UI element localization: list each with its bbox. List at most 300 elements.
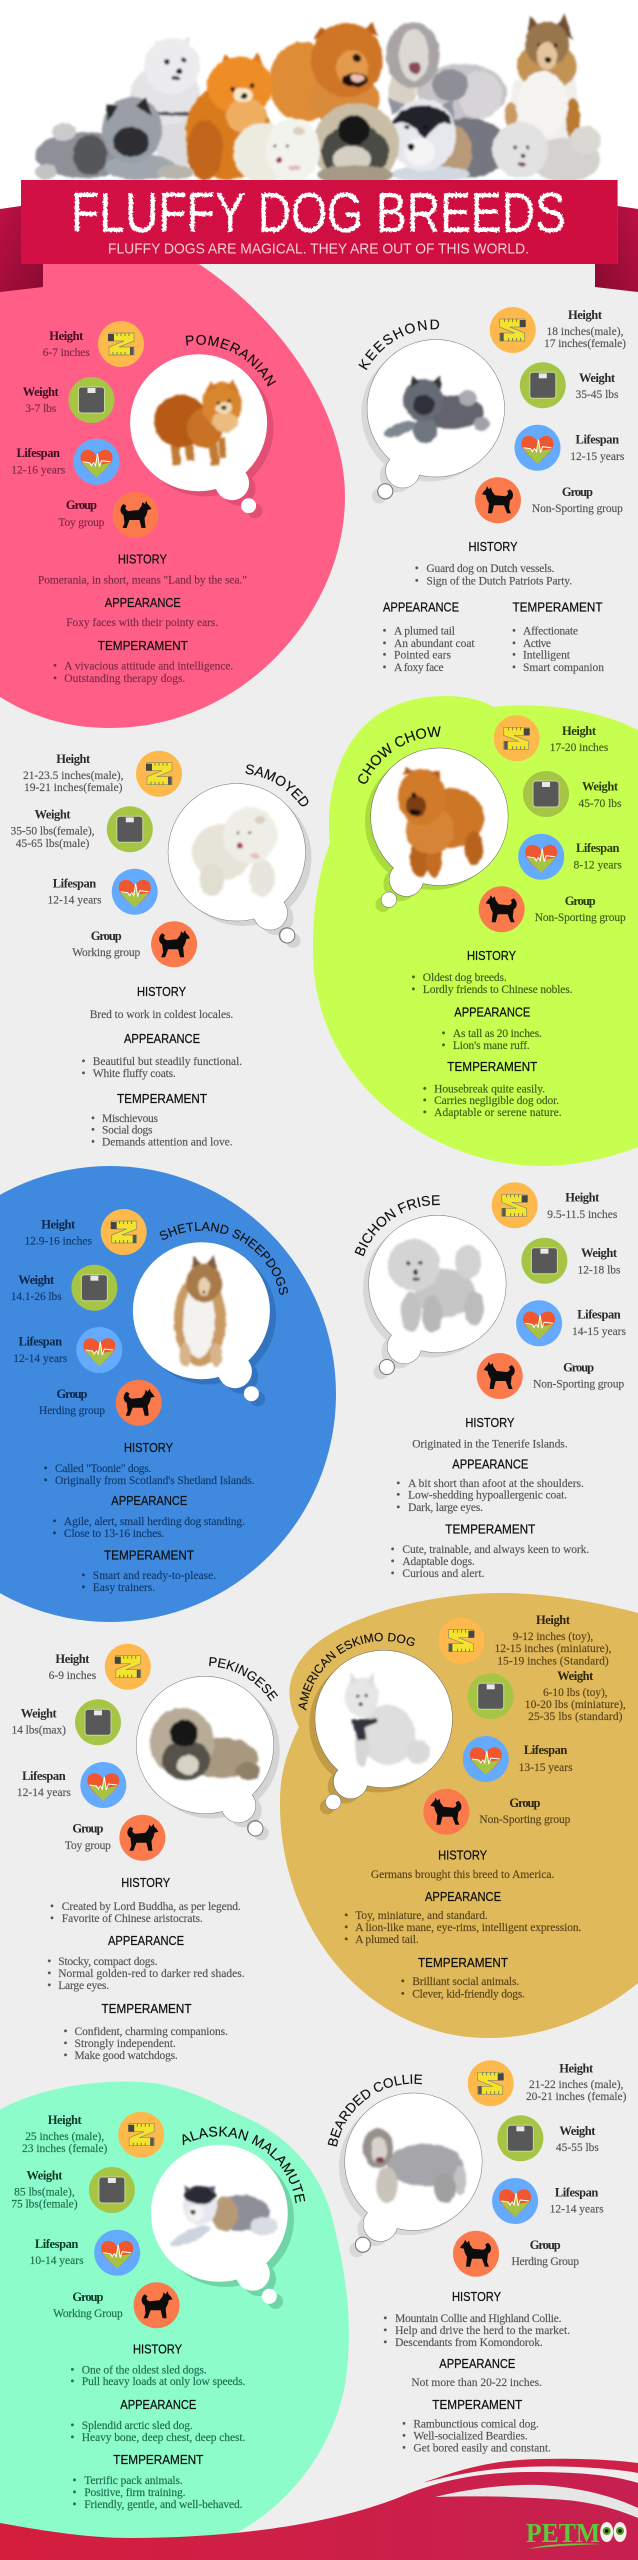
text: temperament: Cute, trainable, and always keen to work. bbox=[402, 1544, 589, 1556]
stat: weight bbox=[11, 1699, 121, 1745]
text: temperament: • bbox=[91, 1124, 95, 1136]
text: temperament: • bbox=[423, 1107, 427, 1119]
text: temperament: • bbox=[64, 2026, 68, 2038]
text: appearance: Heavy bone, deep chest, deep chest. bbox=[82, 2432, 246, 2444]
text: temperament: • bbox=[402, 2430, 406, 2442]
text: temperament: TEMPERAMENT bbox=[418, 1955, 508, 1970]
text: temperament: • bbox=[512, 650, 516, 662]
stat: height: Height bbox=[565, 1190, 600, 1204]
text: history: Help and drive the herd to the market. bbox=[395, 2325, 570, 2337]
stat: weight: 85 lbs(male), bbox=[14, 2186, 75, 2198]
speech bubble bbox=[151, 2145, 294, 2309]
text: appearance: APPEARANCE bbox=[454, 1004, 531, 1020]
text: history: • bbox=[383, 2337, 387, 2349]
text: history bbox=[90, 984, 233, 1021]
stat: height bbox=[24, 1209, 147, 1255]
text: temperament: Confident, charming companions. bbox=[74, 2026, 228, 2038]
text: appearance: • bbox=[47, 1980, 51, 1992]
stat: lifespan: 8-12 years bbox=[574, 860, 622, 872]
text: appearance: • bbox=[382, 638, 387, 650]
stat: group: Group bbox=[66, 498, 97, 512]
text: temperament: Brilliant social animals. bbox=[412, 1976, 519, 1988]
panel: Keeshond bbox=[358, 307, 626, 674]
stat: lifespan: 12-14 years bbox=[17, 1787, 71, 1799]
stat: height bbox=[22, 2112, 164, 2158]
stat: group: Group bbox=[562, 485, 593, 499]
stat: group: Working group bbox=[72, 947, 140, 959]
stat: lifespan bbox=[516, 1300, 627, 1346]
stat: height bbox=[494, 715, 609, 761]
stat: lifespan bbox=[30, 2230, 140, 2276]
text: temperament: • bbox=[53, 673, 57, 685]
stat: lifespan bbox=[492, 2178, 604, 2224]
stat: lifespan: 10-14 years bbox=[30, 2255, 84, 2267]
stat: lifespan bbox=[13, 1327, 122, 1373]
text: history: HISTORY bbox=[137, 984, 186, 999]
stat: weight bbox=[11, 1265, 117, 1311]
text: temperament: TEMPERAMENT bbox=[113, 2452, 203, 2467]
breed name: POMERANIAN bbox=[186, 334, 276, 386]
breed name: AMERICAN ESKIMO DOG bbox=[298, 1632, 415, 1710]
text: temperament: Adaptable or serene nature. bbox=[434, 1107, 562, 1119]
text: appearance: • bbox=[47, 1968, 51, 1980]
stat: group: Group bbox=[530, 2238, 561, 2252]
dog: collie bbox=[505, 14, 580, 143]
stat: lifespan: Lifespan bbox=[53, 876, 96, 890]
text: appearance bbox=[66, 595, 218, 629]
stat: group bbox=[65, 1815, 165, 1861]
stat: height bbox=[492, 1182, 618, 1228]
stat: group: Herding Group bbox=[511, 2256, 579, 2268]
dog photo: American Eskimo Dog bbox=[345, 1672, 430, 1767]
text: appearance: • bbox=[52, 1516, 57, 1528]
text: appearance: • bbox=[52, 1528, 57, 1540]
text: appearance: White fluffy coats. bbox=[93, 1068, 176, 1080]
dog: chow chow bbox=[269, 22, 383, 126]
stat: height bbox=[43, 321, 144, 367]
stat: height bbox=[468, 2060, 627, 2106]
stat: height: 21-22 inches (male), bbox=[529, 2079, 624, 2091]
stat: lifespan: Lifespan bbox=[576, 432, 619, 446]
stat: group bbox=[477, 1353, 624, 1399]
stat: lifespan: 13-15 years bbox=[519, 1762, 573, 1774]
stat: lifespan bbox=[518, 834, 622, 880]
text: temperament: • bbox=[81, 1570, 85, 1582]
text: history: Called "Toonie" dogs. bbox=[55, 1463, 152, 1475]
stat: group: Group bbox=[563, 1360, 594, 1374]
stat: lifespan: Lifespan bbox=[16, 446, 60, 460]
stat: height: 12.9-16 inches bbox=[24, 1236, 92, 1248]
text: appearance: • bbox=[47, 1956, 51, 1968]
stat: height: 23 inches (female) bbox=[22, 2143, 108, 2155]
text: temperament bbox=[64, 2001, 228, 2062]
text: appearance: An abundant coat bbox=[394, 638, 475, 650]
text: appearance: • bbox=[396, 1502, 400, 1514]
stat: lifespan: 12-15 years bbox=[570, 451, 625, 463]
text: history: • bbox=[70, 2376, 74, 2388]
panel: Pomeranian bbox=[0, 264, 345, 728]
text: appearance: • bbox=[442, 1028, 446, 1040]
text: history: Germans brought this breed to America. bbox=[371, 1869, 554, 1881]
stat: height: 6-7 inches bbox=[43, 347, 90, 359]
text: history: Guard dog on Dutch vessels. bbox=[426, 563, 555, 575]
speech bubble bbox=[339, 2093, 482, 2257]
text: appearance: • bbox=[442, 1040, 446, 1052]
stat: height bbox=[23, 751, 182, 797]
text: history: Sign of the Dutch Patriots Party. bbox=[426, 576, 572, 588]
speech bubble bbox=[130, 354, 274, 518]
text: appearance bbox=[411, 2356, 542, 2389]
text: history: • bbox=[383, 2313, 387, 2325]
text: temperament: • bbox=[391, 1568, 395, 1580]
text: temperament: Positive, firm training. bbox=[84, 2487, 186, 2499]
text: appearance: • bbox=[396, 1478, 400, 1490]
stat: lifespan: Lifespan bbox=[22, 1769, 66, 1783]
dog: samoyed bbox=[233, 118, 320, 183]
text: history bbox=[70, 2342, 246, 2388]
text: history: Originally from Scotland's Shetland Islands. bbox=[55, 1475, 255, 1487]
text: temperament: Terrific pack animals. bbox=[84, 2475, 183, 2487]
ribbon: left tail bbox=[0, 206, 43, 292]
stat: weight bbox=[523, 771, 622, 817]
stat: weight: 12-18 lbs bbox=[578, 1264, 621, 1276]
breed name: CHOW CHOW bbox=[358, 726, 441, 784]
dog photo: Pomeranian bbox=[154, 380, 242, 465]
text: temperament bbox=[423, 1059, 562, 1119]
stat: height: 17 inches(female) bbox=[544, 338, 626, 350]
text: temperament: • bbox=[423, 1084, 427, 1096]
text: history: Pull heavy loads at only low speeds. bbox=[82, 2376, 246, 2388]
text: history: HISTORY bbox=[465, 1415, 515, 1430]
stat: height: 6-9 inches bbox=[49, 1670, 97, 1682]
stat: group: Group bbox=[565, 894, 596, 908]
stat: group: Non-Sporting group bbox=[535, 912, 626, 924]
subtitle: FLUFFY DOGS ARE MAGICAL. THEY ARE OUT OF THIS WORLD. bbox=[108, 240, 529, 258]
dog photo: Pekingese bbox=[150, 1708, 260, 1780]
text: appearance: • bbox=[70, 2420, 74, 2432]
dog photo: Shetland Sheepdog bbox=[174, 1255, 226, 1367]
stat: height: Height bbox=[562, 724, 597, 738]
header dogs group photo bbox=[35, 14, 601, 187]
stat: lifespan bbox=[17, 1762, 126, 1808]
text: history: HISTORY bbox=[121, 1875, 170, 1890]
stat: weight: Weight bbox=[23, 385, 60, 399]
stat: height: 25 inches (male), bbox=[25, 2131, 104, 2143]
dog photo: Bearded Collie bbox=[363, 2128, 466, 2203]
text: temperament: • bbox=[91, 1113, 95, 1125]
stat: group: Group bbox=[72, 1822, 103, 1836]
text: temperament: Social dogs bbox=[102, 1124, 153, 1136]
text: history bbox=[383, 2289, 570, 2349]
text: temperament: Active bbox=[523, 638, 551, 650]
stat: height: Height bbox=[55, 1652, 90, 1666]
logo: PetMoo: OO bbox=[600, 2520, 627, 2545]
speech bubble bbox=[309, 1650, 452, 1814]
text: appearance: Toy, miniature, and standard. bbox=[355, 1910, 488, 1922]
speech bubble bbox=[168, 784, 312, 948]
stat: height: Height bbox=[536, 1613, 571, 1627]
text: temperament: TEMPERAMENT bbox=[445, 1522, 535, 1536]
banner bbox=[21, 180, 618, 264]
dog: pomeranian bbox=[186, 53, 273, 180]
text: history bbox=[44, 1440, 255, 1487]
text: history: • bbox=[411, 972, 415, 984]
footer wave bbox=[0, 2459, 638, 2560]
text: temperament bbox=[91, 1091, 233, 1148]
stat: height: 17-20 inches bbox=[550, 742, 609, 754]
stat: height: Height bbox=[568, 308, 603, 322]
text: temperament: • bbox=[391, 1556, 395, 1568]
text: temperament: • bbox=[512, 626, 516, 638]
text: temperament: • bbox=[401, 1976, 405, 1988]
stat: weight: 75 lbs(female) bbox=[11, 2198, 78, 2210]
blob: blue background bbox=[0, 1166, 336, 1622]
text: temperament: • bbox=[512, 638, 516, 650]
text: appearance: • bbox=[82, 1056, 86, 1068]
stat: group: Herding group bbox=[39, 1405, 105, 1417]
text: temperament: Demands attention and love. bbox=[102, 1136, 233, 1148]
text: appearance: • bbox=[382, 626, 387, 638]
text: appearance: A lion-like mane, eye-rims, intelligent expression. bbox=[355, 1922, 582, 1934]
stat: lifespan: 14-15 years bbox=[572, 1326, 627, 1338]
text: appearance: Beautiful but steadily functional. bbox=[93, 1056, 242, 1068]
text: appearance bbox=[52, 1493, 245, 1540]
text: history bbox=[50, 1875, 241, 1925]
dog: bichon bbox=[492, 122, 601, 182]
text: temperament bbox=[401, 1955, 525, 2000]
text: temperament: • bbox=[53, 660, 57, 672]
text: appearance bbox=[70, 2397, 246, 2444]
text: appearance bbox=[82, 1031, 242, 1080]
text: temperament: TEMPERAMENT bbox=[432, 2397, 522, 2412]
panel: Bichon Frise bbox=[354, 1182, 627, 1580]
text: history bbox=[38, 552, 247, 586]
speech bubble bbox=[365, 748, 508, 912]
text: history: HISTORY bbox=[438, 1848, 487, 1862]
stat: lifespan bbox=[48, 869, 158, 915]
text: appearance: APPEARANCE bbox=[425, 1889, 501, 1904]
stat: height: 20-21 inches (female) bbox=[526, 2091, 627, 2103]
text: temperament: A vivacious attitude and intelligence. bbox=[64, 660, 233, 672]
text: appearance: • bbox=[344, 1934, 348, 1946]
text: appearance bbox=[396, 1456, 584, 1514]
text: history: • bbox=[44, 1463, 48, 1475]
text: temperament: Adaptable dogs. bbox=[402, 1556, 475, 1568]
text: temperament: Affectionate bbox=[523, 626, 578, 638]
text: temperament: Well-socialized Beardies. bbox=[413, 2430, 528, 2442]
text: temperament: • bbox=[72, 2487, 77, 2499]
text: temperament: TEMPERAMENT bbox=[512, 600, 603, 614]
stat: group bbox=[53, 2282, 180, 2328]
text: temperament: • bbox=[91, 1136, 95, 1148]
stat: height: Height bbox=[41, 1218, 76, 1232]
stat: weight: 45-55 lbs bbox=[556, 2142, 599, 2154]
text: temperament bbox=[512, 600, 604, 674]
stat: height: Height bbox=[559, 2062, 594, 2076]
text: appearance: APPEARANCE bbox=[124, 1031, 200, 1046]
text: history: Lordly friends to Chinese nobles. bbox=[423, 984, 573, 996]
text: temperament: Friendly, gentle, and well-behaved. bbox=[84, 2499, 243, 2511]
text: history bbox=[415, 539, 572, 588]
text: appearance: Agile, alert, small herding dog standing. bbox=[64, 1516, 245, 1528]
text: history bbox=[412, 1415, 568, 1450]
stat: group: Non-Sporting group bbox=[532, 503, 623, 515]
stat: weight bbox=[10, 806, 153, 852]
stat: lifespan: Lifespan bbox=[524, 1743, 567, 1757]
stat: weight: 35-50 lbs(female), bbox=[10, 826, 95, 838]
stat: group: Working Group bbox=[53, 2308, 123, 2320]
logo: PetMoo: PETM bbox=[526, 2518, 600, 2548]
stat: group: Group bbox=[91, 929, 122, 943]
stat: weight bbox=[468, 1669, 626, 1723]
stat: height: 15-19 inches (Standard) bbox=[497, 1656, 609, 1668]
stat: weight bbox=[23, 377, 114, 423]
dog: bearded collie bbox=[386, 22, 507, 120]
text: appearance: • bbox=[82, 1068, 86, 1080]
stat: weight: Weight bbox=[557, 1669, 594, 1683]
stat: weight: 25-35 lbs (standard) bbox=[528, 1711, 623, 1723]
text: history: HISTORY bbox=[133, 2342, 182, 2356]
stat: lifespan: Lifespan bbox=[555, 2186, 598, 2200]
stat: weight bbox=[11, 2167, 135, 2213]
stat: weight bbox=[520, 362, 619, 408]
stat: lifespan: Lifespan bbox=[35, 2237, 78, 2251]
text: appearance: • bbox=[344, 1922, 348, 1934]
stat: group: Non-Sporting group bbox=[479, 1814, 571, 1826]
stat: weight: 14.1-26 lbs bbox=[11, 1291, 62, 1303]
dog photo: Chow Chow bbox=[398, 767, 484, 877]
dog photo: Alaskan Malamute bbox=[168, 2186, 278, 2251]
dog: pekingese bbox=[313, 103, 399, 187]
text: temperament: Outstanding therapy dogs. bbox=[64, 673, 185, 685]
dog photo: Samoyed bbox=[192, 807, 277, 897]
text: appearance: • bbox=[382, 662, 387, 674]
stat: lifespan: Lifespan bbox=[576, 841, 619, 855]
stat: group: Toy group bbox=[65, 1840, 111, 1852]
text: temperament: Strongly independent. bbox=[74, 2038, 176, 2050]
stat: weight: Weight bbox=[582, 780, 619, 794]
text: appearance: Stocky, compact dogs. bbox=[58, 1956, 158, 1968]
stat: group: Toy group bbox=[58, 517, 105, 529]
text: temperament: Smart and ready-to-please. bbox=[93, 1570, 216, 1582]
text: appearance: Dark, large eyes. bbox=[408, 1502, 483, 1514]
stat: height bbox=[490, 307, 626, 353]
text: appearance: A bit short than afoot at the shoulders. bbox=[408, 1478, 584, 1490]
text: appearance: APPEARANCE bbox=[452, 1456, 529, 1472]
text: appearance: Lion's mane ruff. bbox=[453, 1040, 530, 1052]
panel: Chow Chow bbox=[313, 696, 638, 1166]
text: history: Favorite of Chinese aristocrats. bbox=[62, 1913, 203, 1925]
text: history bbox=[411, 948, 573, 996]
stat: weight: Weight bbox=[579, 371, 616, 385]
stat: group bbox=[58, 492, 158, 538]
stat: weight: Weight bbox=[21, 1706, 58, 1720]
stat: weight: Weight bbox=[18, 1273, 55, 1287]
text: appearance bbox=[442, 1004, 542, 1052]
panel: Samoyed bbox=[10, 750, 312, 1148]
text: temperament: • bbox=[81, 1582, 85, 1594]
text: temperament bbox=[391, 1522, 589, 1580]
stat: group bbox=[475, 477, 623, 523]
text: appearance: • bbox=[396, 1490, 400, 1502]
text: temperament: Intelligent bbox=[523, 650, 571, 662]
text: temperament: Clever, kid-friendly dogs. bbox=[412, 1988, 525, 2000]
stat: lifespan: Lifespan bbox=[577, 1308, 621, 1322]
text: history: • bbox=[411, 984, 415, 996]
stat: weight: 45-70 lbs bbox=[578, 798, 622, 810]
breed name: KEESHOND bbox=[358, 320, 440, 370]
text: appearance bbox=[344, 1889, 582, 1946]
speech bubble bbox=[363, 1216, 506, 1380]
speech bubble bbox=[361, 340, 504, 504]
stat: weight bbox=[521, 1238, 621, 1284]
breed name: SAMOYED bbox=[245, 764, 308, 806]
text: appearance: APPEARANCE bbox=[111, 1493, 188, 1508]
text: appearance: APPEARANCE bbox=[105, 595, 181, 610]
text: history: • bbox=[70, 2364, 74, 2376]
breed name: BICHON FRISE bbox=[354, 1195, 440, 1256]
text: history: HISTORY bbox=[452, 2289, 501, 2304]
text: temperament: TEMPERAMENT bbox=[117, 1091, 207, 1106]
text: appearance: • bbox=[344, 1910, 348, 1922]
stat: lifespan bbox=[463, 1736, 573, 1782]
breed name: PEKINGESE bbox=[209, 1657, 278, 1702]
stat: height: Height bbox=[49, 329, 84, 343]
stat: group bbox=[39, 1380, 162, 1426]
text: temperament bbox=[81, 1548, 216, 1594]
text: appearance: As tall as 20 inches. bbox=[453, 1028, 542, 1040]
text: history: HISTORY bbox=[124, 1440, 173, 1455]
dog photo: Bichon Frise bbox=[388, 1239, 484, 1333]
text: history: Descendants from Komondorok. bbox=[395, 2337, 543, 2349]
text: temperament: • bbox=[391, 1544, 395, 1556]
blob: mint background bbox=[0, 2082, 349, 2560]
text: appearance: • bbox=[382, 650, 387, 662]
stat: height: 12-15 inches (miniature), bbox=[494, 1643, 612, 1655]
stat: height: 19-21 inches(female) bbox=[24, 782, 123, 794]
text: appearance: Pointed ears bbox=[394, 650, 452, 662]
text: history: • bbox=[415, 576, 419, 588]
stat: weight: 3-7 lbs bbox=[25, 403, 57, 415]
text: history: • bbox=[44, 1475, 48, 1487]
stat: weight: 14 lbs(max) bbox=[11, 1724, 66, 1736]
text: temperament: Carries negligible dog odor. bbox=[434, 1095, 559, 1107]
text: history: • bbox=[415, 563, 419, 575]
stat: height bbox=[49, 1644, 151, 1690]
text: history: Oldest dog breeds. bbox=[423, 972, 507, 984]
text: appearance: Not more than 20-22 inches. bbox=[411, 2377, 542, 2389]
blob: gold background bbox=[280, 1593, 638, 2038]
text: appearance: • bbox=[70, 2432, 74, 2444]
stat: group: Group bbox=[72, 2290, 103, 2304]
text: history: HISTORY bbox=[467, 948, 516, 963]
text: history: Mountain Collie and Highland Collie. bbox=[395, 2313, 562, 2325]
stat: height: 18 inches(male), bbox=[546, 326, 624, 338]
text: temperament: Mischievous bbox=[102, 1113, 159, 1125]
stat: weight: Weight bbox=[34, 808, 71, 822]
text: appearance bbox=[382, 600, 475, 674]
stat: height: 9-12 inches (toy), bbox=[513, 1631, 593, 1643]
text: appearance: Normal golden-red to darker red shades. bbox=[58, 1968, 245, 1980]
text: appearance: APPEARANCE bbox=[120, 2397, 197, 2412]
stat: lifespan: 12-14 years bbox=[550, 2204, 604, 2216]
dog: keeshond bbox=[35, 97, 194, 180]
stat: height: Height bbox=[48, 2113, 83, 2127]
blob: pink background bbox=[0, 264, 345, 728]
text: appearance: Splendid arctic sled dog. bbox=[82, 2420, 193, 2432]
text: temperament: • bbox=[64, 2050, 68, 2062]
breed name: SHETLAND SHEEPDOGS bbox=[160, 1222, 288, 1295]
